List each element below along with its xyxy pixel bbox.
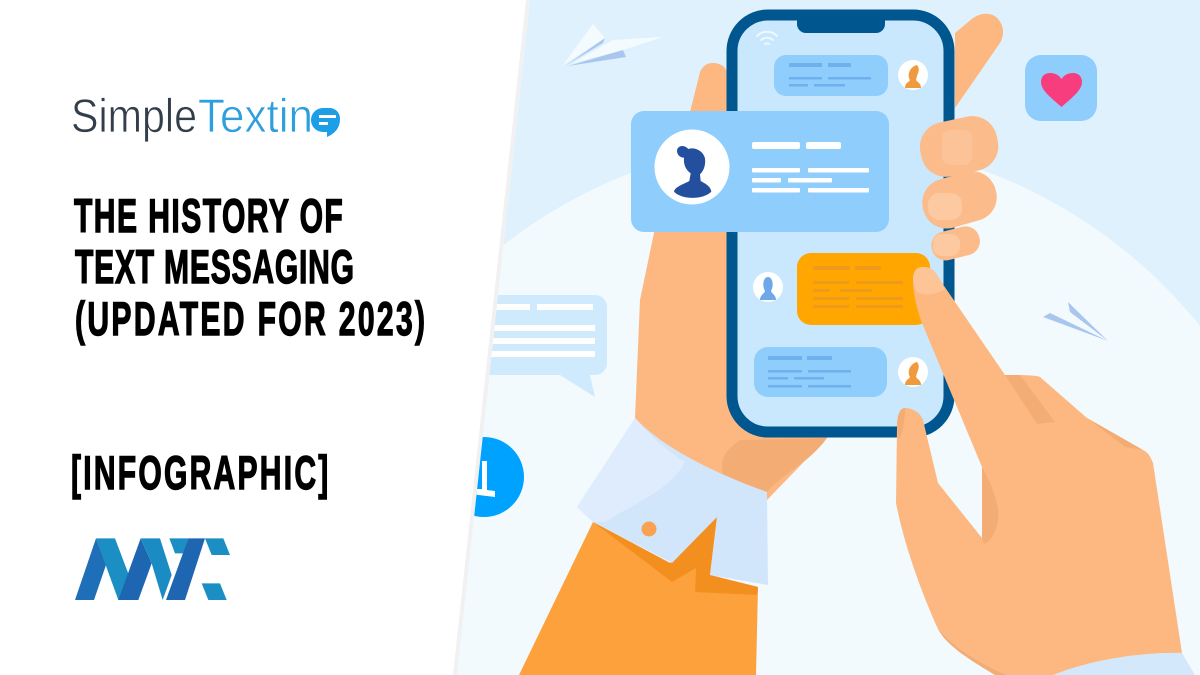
icon: paper plane top left: [563, 24, 663, 66]
chat bubble 3: [754, 347, 887, 397]
title: THE HISTORY OF: [74, 190, 343, 243]
fingertips: [913, 267, 945, 294]
title: TEXT MESSAGING: [75, 241, 354, 294]
right hand: [896, 267, 1195, 675]
left sleeve: [519, 517, 758, 675]
profile text lines: [752, 142, 869, 192]
left hand: fingers over phone: [915, 111, 1003, 263]
profile card: [631, 111, 889, 232]
avatar 3: [898, 357, 928, 387]
icon: wifi: [757, 32, 777, 44]
chat bubble orange: [797, 253, 930, 325]
logo: SimpleTexting: Simple: [71, 89, 197, 142]
icon: heart tile: [1025, 55, 1097, 121]
phone: [732, 15, 949, 432]
left hand: arm and palm: [635, 14, 1003, 500]
logo: SimpleTexting: [71, 89, 340, 142]
icon: blue notification badge: [474, 437, 524, 517]
logo: SimpleTexting: Textin: [198, 89, 313, 142]
title: (UPDATED FOR 2023): [75, 293, 425, 346]
logo: MTC mark: [75, 538, 230, 600]
phone notch: [797, 18, 885, 33]
hand shading: [1005, 375, 1055, 424]
panel: illustration background: [453, 0, 1200, 675]
subtitle: infographic tag: [INFOGRAPHIC]: [71, 447, 328, 500]
icon: logo speech bubble: [311, 108, 340, 137]
icon: speech bubble left: [490, 295, 607, 397]
left shirt cuff: [577, 418, 768, 585]
icon: paper plane right: [1043, 302, 1108, 341]
profile avatar: [654, 130, 730, 204]
chat bubble 1: [774, 55, 888, 96]
title: [74, 190, 425, 346]
index finger behind phone: [955, 14, 1003, 108]
avatar 2: [753, 272, 783, 302]
avatar 1: [898, 60, 928, 90]
cuff button: [642, 522, 656, 536]
thumb: [690, 63, 727, 112]
